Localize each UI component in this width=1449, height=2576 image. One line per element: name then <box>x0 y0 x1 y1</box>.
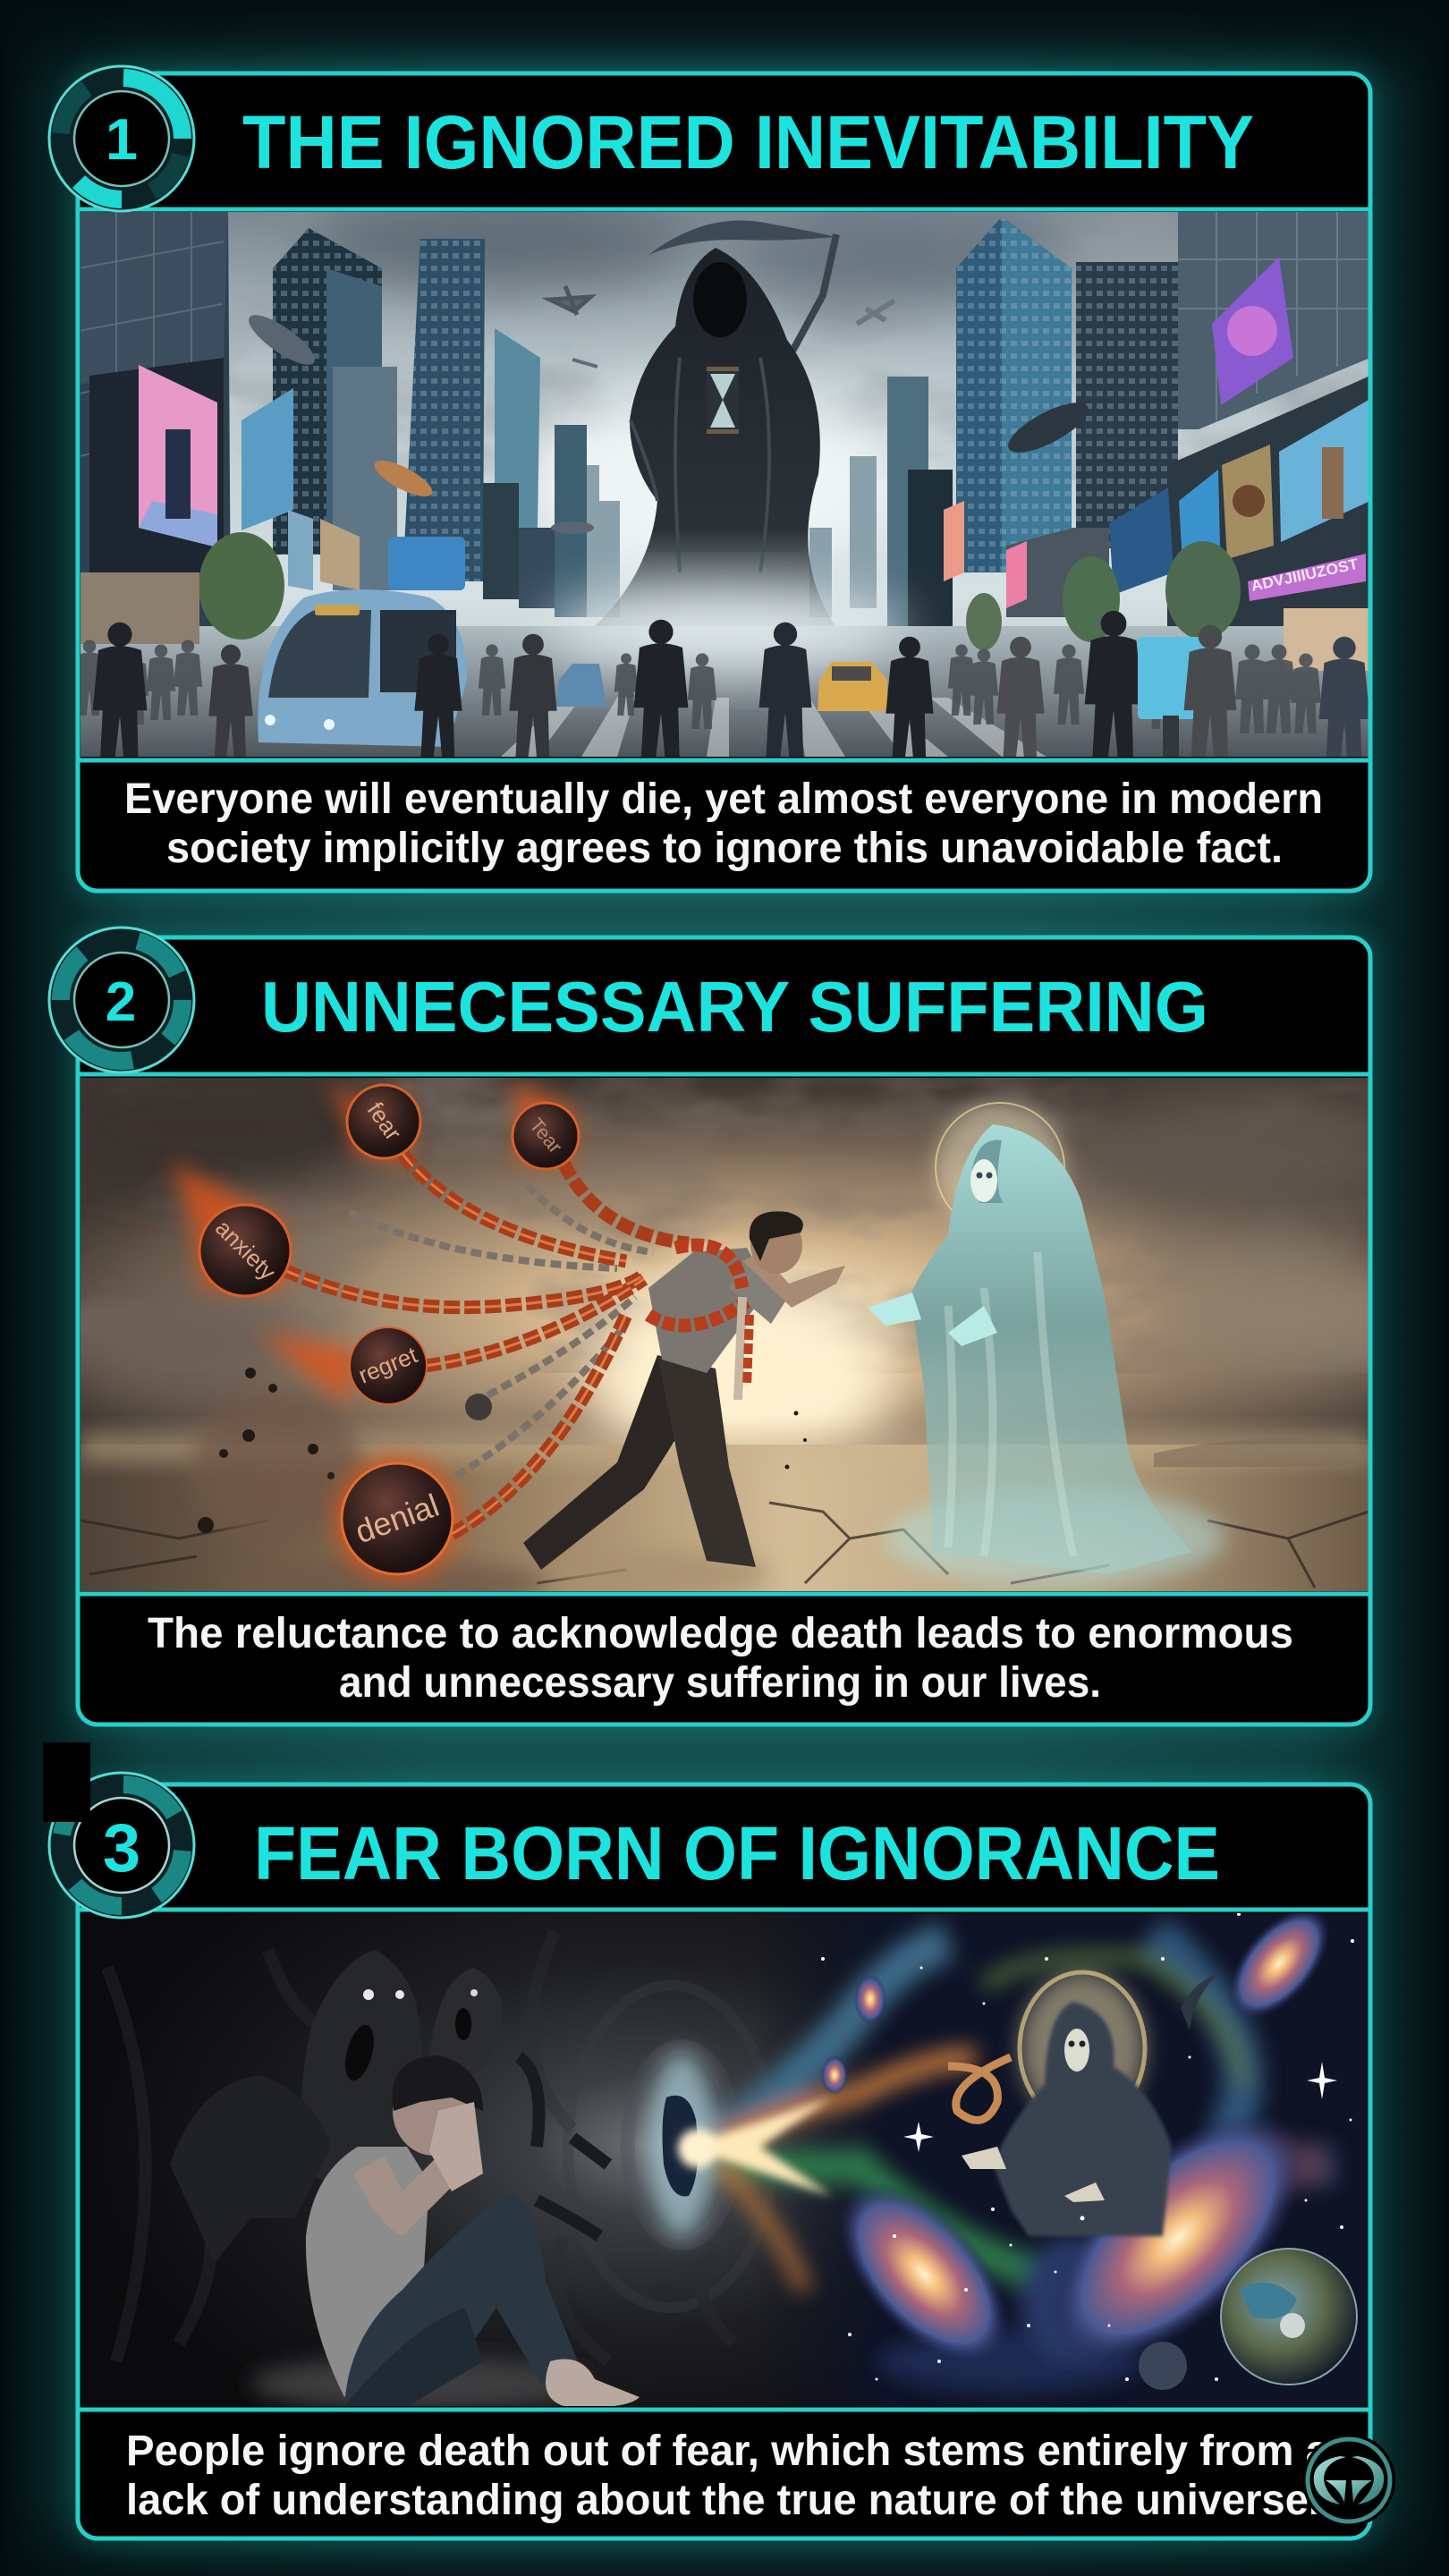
black redaction block <box>43 1742 90 1822</box>
billboards <box>139 257 1370 617</box>
logo seal <box>1302 2434 1395 2527</box>
glowing portal <box>648 2051 832 2239</box>
street and crosswalk <box>79 532 1370 757</box>
illustration: man chained to burning weights reaching for ghostly figure <box>80 1078 1368 1591</box>
weights with emotion labels: anxiety <box>210 1215 281 1285</box>
cosmic streams <box>707 1932 1333 2393</box>
weights with emotion labels: Tear <box>525 1114 567 1157</box>
panel 2 border and rules <box>78 937 1370 1724</box>
caption 2: and unnecessary suffering in our lives. <box>339 1659 1101 1707</box>
panel 2 frame fill <box>78 937 1370 1724</box>
spiral wisp <box>948 2057 1011 2120</box>
gray chains <box>349 1185 653 1476</box>
weights with emotion labels: fear <box>362 1097 407 1146</box>
weights with emotion labels: regret <box>355 1341 421 1389</box>
caption 1 <box>124 775 1323 872</box>
panel 3 frame fill <box>78 1784 1370 2538</box>
panel 1 border and rules <box>78 73 1370 891</box>
caption 3: People ignore death out of fear, which stems entirely from a <box>126 2428 1329 2475</box>
illustration: frightened man in cave, portal opening to cosmic death <box>80 1889 1368 2415</box>
number badge 3: 3 <box>103 1810 140 1886</box>
number badge 2 <box>49 928 194 1072</box>
weights with emotion labels <box>199 1085 579 1574</box>
number badge 3 <box>49 1773 194 1918</box>
cave swirls <box>107 1932 774 2361</box>
flames around weights <box>170 1082 572 1581</box>
number badge 1: 1 <box>106 106 138 172</box>
billboards: ADVJIIIUZOST <box>1250 555 1360 595</box>
shadow monsters <box>170 1950 608 2263</box>
number badge 2: 2 <box>106 971 136 1033</box>
caption 2: The reluctance to acknowledge death leads to enormous <box>148 1610 1293 1657</box>
title 1: THE IGNORED INEVITABILITY <box>242 100 1254 184</box>
illustration: grim reaper looming over city crowd <box>75 197 1370 770</box>
panel 3 border and rules <box>78 1784 1370 2538</box>
stars <box>821 1912 1354 2381</box>
frightened man covering face <box>250 2055 640 2415</box>
number badge 1 <box>49 66 194 211</box>
galaxies <box>806 1889 1350 2409</box>
caption 3 <box>126 2428 1329 2524</box>
panel 1 frame fill <box>78 73 1370 891</box>
cosmic death figure <box>962 1972 1221 2236</box>
caption 2 <box>148 1610 1293 1707</box>
red hot chains <box>284 1154 689 1534</box>
caption 3: lack of understanding about the true nature of the universe. <box>126 2477 1320 2524</box>
caption 1: society implicitly agrees to ignore this unavoidable fact. <box>166 825 1283 872</box>
panel 3: fear born of ignorance <box>49 1773 1370 2538</box>
dust cloud <box>192 1391 769 1608</box>
weights with emotion labels: denial <box>351 1487 444 1550</box>
planets <box>1139 2249 1357 2390</box>
flying vehicles <box>242 286 1095 534</box>
ghostly figure of death <box>868 1103 1225 1588</box>
caption 1: Everyone will eventually die, yet almost everyone in modern <box>124 775 1323 823</box>
title 2: UNNECESSARY SUFFERING <box>261 967 1208 1046</box>
title 3: FEAR BORN OF IGNORANCE <box>254 1811 1220 1895</box>
panel 2: unnecessary suffering <box>36 928 1422 1724</box>
background crowd <box>75 640 1321 733</box>
iron weight small <box>465 1394 492 1420</box>
bus and cars <box>258 589 887 747</box>
panel 1: the ignored inevitability <box>49 66 1370 891</box>
grim reaper <box>595 221 850 652</box>
chained man <box>523 1211 845 1570</box>
foreground pedestrians <box>93 611 1370 770</box>
